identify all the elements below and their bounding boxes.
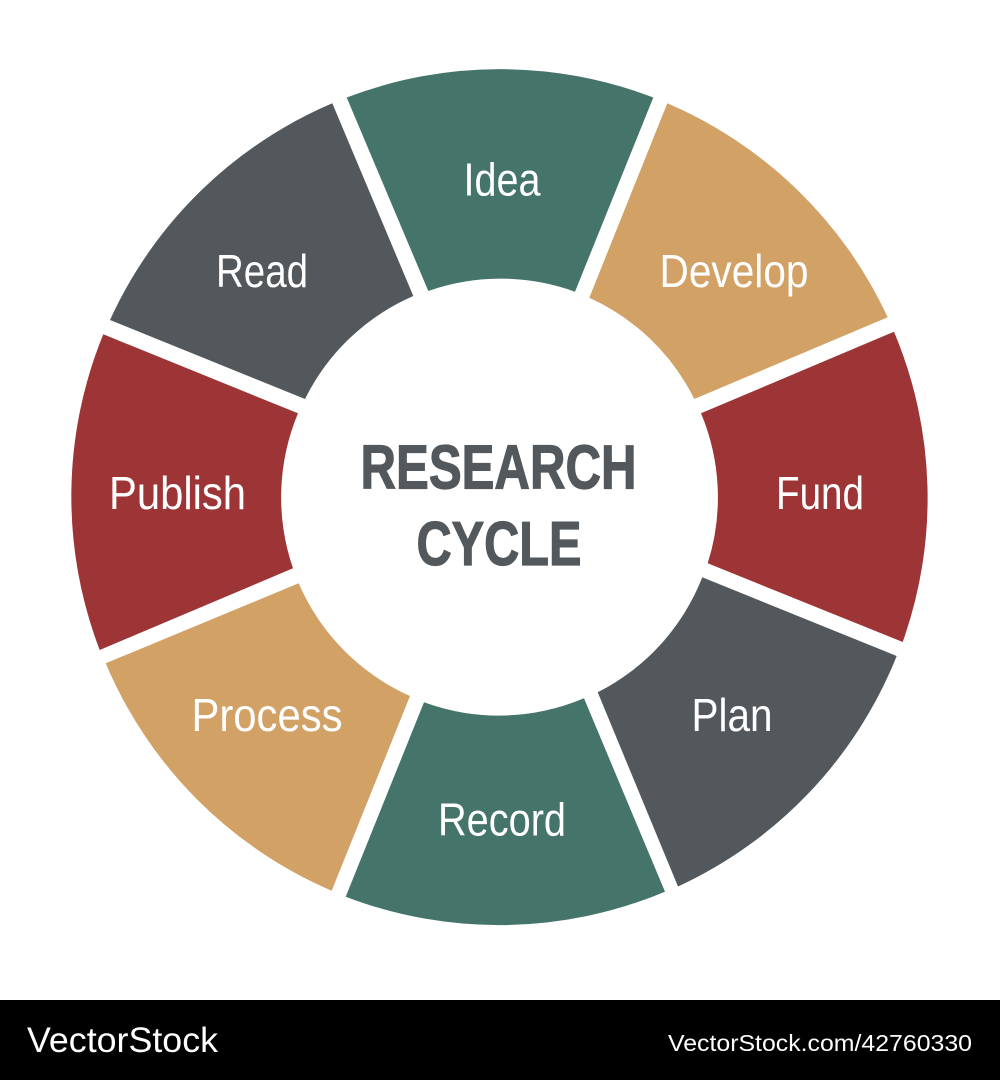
footer url: VectorStock.com/42760330	[668, 1030, 972, 1056]
center title	[360, 434, 636, 579]
segment: Fund: Fund	[776, 467, 864, 519]
center title: RESEARCH	[360, 434, 636, 502]
segment: Develop	[589, 103, 888, 399]
segment: Idea: Idea	[464, 154, 541, 206]
center title: CYCLE	[416, 510, 582, 579]
segment: Idea	[347, 69, 653, 292]
segment: Read	[110, 103, 413, 399]
segment: Fund	[701, 332, 928, 642]
segment: Read: Read	[216, 245, 308, 297]
footer logo: VectorStock	[27, 1021, 219, 1060]
segment: Process	[106, 583, 410, 891]
segment: Plan	[598, 577, 897, 886]
segment: Develop: Develop	[660, 245, 808, 297]
segment: Publish: Publish	[109, 467, 246, 519]
circular diagram	[71, 69, 928, 925]
segment: Plan: Plan	[692, 689, 772, 741]
segment: Record	[346, 698, 665, 925]
segment: Process: Process	[192, 689, 342, 741]
segment: Publish	[71, 334, 298, 650]
segment: Record: Record	[438, 794, 566, 846]
footer bar	[0, 1000, 1000, 1080]
